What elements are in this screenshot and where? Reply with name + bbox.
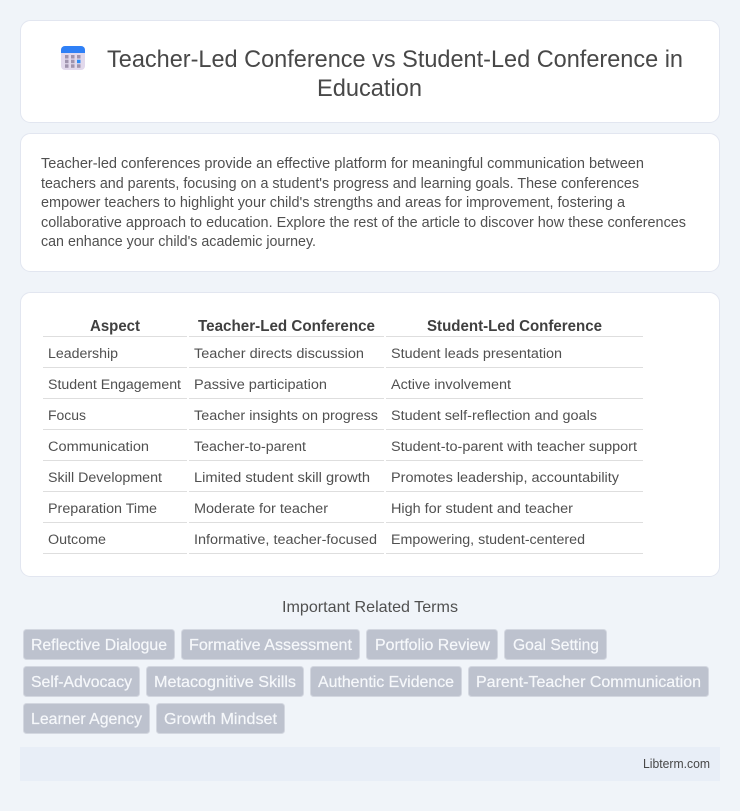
tag: Learner Agency <box>24 704 150 734</box>
footer <box>20 747 720 781</box>
table row: Leadership: Student leads presentation <box>391 346 562 362</box>
text block: introduction paragraph: collaborative approach to education. Explore the rest of the article to discover how these conferences <box>41 215 686 231</box>
tag: Portfolio Review: Portfolio Review <box>375 637 490 654</box>
panel: title header <box>20 20 720 122</box>
heading: important related terms: Important Related Terms <box>282 599 458 616</box>
table row: Skill Development <box>43 470 643 492</box>
table row: Focus: Focus <box>48 408 86 424</box>
table row: Leadership <box>43 346 643 368</box>
table row: Student Engagement: Active involvement <box>391 377 511 393</box>
table row: Focus: Teacher insights on progress <box>194 408 378 424</box>
table row: Focus <box>43 408 643 430</box>
tag: Reflective Dialogue <box>24 630 174 660</box>
table row: Outcome: Informative, teacher-focused <box>194 532 377 548</box>
table row: Communication <box>43 439 643 461</box>
tag: Goal Setting: Goal Setting <box>513 637 599 654</box>
table row: Preparation Time <box>43 501 643 523</box>
table row: Preparation Time: High for student and teacher <box>391 501 573 517</box>
text block: introduction paragraph <box>41 156 686 250</box>
tag: Self-Advocacy <box>24 666 140 696</box>
table row: Outcome <box>43 532 643 554</box>
table row: Skill Development: Promotes leadership, accountability <box>391 470 620 486</box>
tag: Learner Agency: Learner Agency <box>31 711 142 728</box>
table row: Student Engagement: Student Engagement <box>48 377 181 393</box>
table row: Communication: Teacher-to-parent <box>194 439 306 455</box>
title: Teacher-Led Conference vs Student-Led Conference in <box>107 46 683 73</box>
term tags <box>24 630 708 734</box>
table row: Communication: Communication <box>48 439 149 455</box>
tag: Growth Mindset: Growth Mindset <box>164 711 278 728</box>
tag: Portfolio Review <box>366 630 498 660</box>
icon: calendar <box>61 46 85 70</box>
text block: introduction paragraph: teachers and parents, focusing on a student's progress and learning goals. These conferences <box>41 176 639 192</box>
table row: Student Engagement <box>43 377 643 399</box>
table row: Outcome: Outcome <box>48 532 106 548</box>
text block: introduction paragraph: Teacher-led conferences provide an effective platform for meaningful communication between <box>41 156 644 172</box>
tag: Growth Mindset <box>156 704 284 734</box>
table row: Leadership: Teacher directs discussion <box>194 346 364 362</box>
table row: Skill Development: Skill Development <box>48 470 162 486</box>
table row: Outcome: Empowering, student-centered <box>391 532 585 548</box>
tag: Formative Assessment: Formative Assessment <box>189 637 353 654</box>
table row: Focus: Student self-reflection and goals <box>391 408 597 424</box>
tag: Reflective Dialogue: Reflective Dialogue <box>31 637 167 654</box>
table row: Leadership: Leadership <box>48 346 118 362</box>
title <box>107 46 683 102</box>
title: Education <box>317 75 422 102</box>
tag: Parent-Teacher Communication <box>468 666 708 696</box>
tag: Goal Setting <box>504 630 606 660</box>
table header row: Student-Led Conference <box>427 318 602 335</box>
table header row: Teacher-Led Conference <box>198 318 375 335</box>
tag: Authentic Evidence: Authentic Evidence <box>318 674 454 691</box>
tag: Authentic Evidence <box>310 666 462 696</box>
table header row <box>43 318 643 337</box>
tag: Self-Advocacy: Self-Advocacy <box>31 674 132 691</box>
tag: Metacognitive Skills: Metacognitive Skills <box>154 674 296 691</box>
text block: introduction paragraph: can enhance your child's academic journey. <box>41 234 316 250</box>
table row: Student Engagement: Passive participation <box>194 377 327 393</box>
panel: comparison table <box>20 292 720 576</box>
tag: Parent-Teacher Communication: Parent-Teacher Communication <box>476 674 701 691</box>
footer: Libterm.com <box>643 757 710 771</box>
table row: Skill Development: Limited student skill growth <box>194 470 370 486</box>
tag: Formative Assessment <box>182 630 360 660</box>
text block: introduction paragraph: empower teachers to highlight your child's strengths and areas for improvement, fostering a <box>41 195 625 211</box>
table row: Preparation Time: Preparation Time <box>48 501 157 517</box>
table row: Communication: Student-to-parent with teacher support <box>391 439 637 455</box>
panel: introduction <box>20 134 720 272</box>
table header row: Aspect <box>90 318 141 335</box>
table row: Preparation Time: Moderate for teacher <box>194 501 328 517</box>
tag: Metacognitive Skills <box>146 666 304 696</box>
